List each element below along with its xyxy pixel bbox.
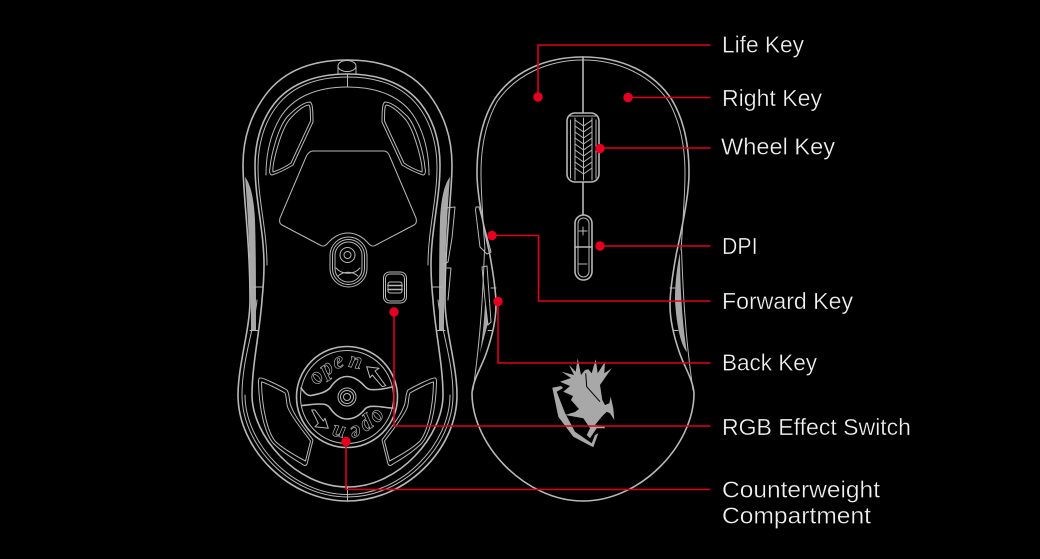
optical sensor xyxy=(330,237,367,287)
side button edge xyxy=(444,207,455,300)
callout: Counterweight Compartment xyxy=(341,437,881,528)
disc label upper: open xyxy=(302,347,365,388)
callout: Right Key xyxy=(623,85,822,111)
shell outline, left half xyxy=(472,57,583,501)
callout: Right Key: Right Key xyxy=(722,85,822,111)
centre seam xyxy=(582,57,584,215)
back side button xyxy=(482,266,491,325)
callout: Forward Key xyxy=(487,231,854,314)
callout: Forward Key: Forward Key xyxy=(722,288,854,314)
disc label lower: open xyxy=(329,406,392,447)
mouse top view xyxy=(472,57,694,501)
disc arrow upper xyxy=(367,367,386,387)
callout: Wheel Key xyxy=(595,134,836,160)
shell outline, right half xyxy=(583,57,694,501)
centre pad xyxy=(280,151,416,246)
counterweight disc xyxy=(296,346,398,448)
callout: Counterweight Compartment: Counterweight xyxy=(722,476,881,502)
top cap xyxy=(338,60,356,501)
callout: RGB Effect Switch xyxy=(389,307,911,440)
callout: Life Key: Life Key xyxy=(722,32,804,58)
forward side button xyxy=(476,207,491,254)
RGB switch xyxy=(384,272,406,303)
side slivers xyxy=(480,253,687,353)
shell outline and skates, right half xyxy=(348,60,457,501)
shell outline and skates, left half xyxy=(238,60,348,501)
callout: Back Key xyxy=(493,297,817,376)
callout: RGB Effect Switch: RGB Effect Switch xyxy=(722,414,911,440)
callout: Wheel Key: Wheel Key xyxy=(721,134,836,160)
disc arrow lower xyxy=(312,410,328,428)
DPI buttons xyxy=(575,215,592,280)
callout: DPI xyxy=(595,233,758,259)
callout: Life Key xyxy=(533,32,804,102)
callout: Back Key: Back Key xyxy=(722,350,817,376)
logo: phoenix shield xyxy=(552,358,614,447)
callout: Counterweight Compartment: Compartment xyxy=(722,502,872,528)
scroll wheel xyxy=(567,113,599,182)
mouse underside view xyxy=(238,60,457,501)
callout: DPI: DPI xyxy=(722,233,758,259)
